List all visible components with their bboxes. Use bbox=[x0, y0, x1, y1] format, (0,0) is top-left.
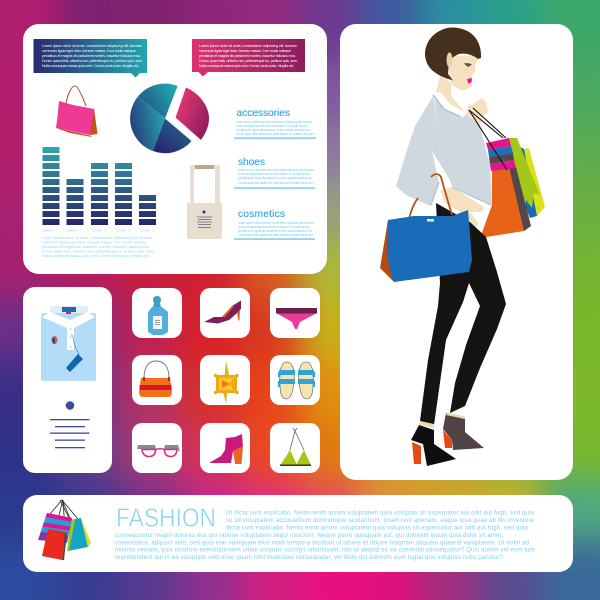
section: cosmetics: penatibus et magnis dis parturient montes, nascetur ridiculus mus. bbox=[238, 229, 313, 233]
illustration: woman with shopping bags bbox=[380, 27, 545, 466]
shopping bag: green bbox=[509, 138, 540, 212]
callout: teal: Lorem ipsum dolor sit amet, consectetuer adipiscing elit. Aenean bbox=[42, 44, 142, 48]
section: shoes: Donec quam felis, ultricies nec, pellentesque eu, pretium quis, sem. bbox=[238, 181, 314, 185]
face bbox=[449, 55, 480, 90]
section: cosmetics: Lorem ipsum dolor sit amet, consectetuer adipiscing elit. Aenean bbox=[238, 221, 314, 225]
neck bbox=[436, 72, 466, 113]
icon: polo shirt bbox=[41, 306, 96, 381]
text block: footer paragraph: su sit voluptatem accusantium doloremque laudantium, totam rem aperiam, eaque ipsa quae ab illo inventore bbox=[226, 518, 535, 524]
callout: pink: Donec quam felis, ultricies nec, pellentesque eu, pretium quis, sem. bbox=[199, 59, 298, 63]
callout: teal: commodo ligula eget dolor. Aenean massa. Cum sociis natoque bbox=[42, 49, 136, 53]
icon tile: briefs bbox=[270, 288, 320, 338]
icon: canvas tote bbox=[187, 165, 222, 239]
icon: shirt label lines bbox=[50, 401, 90, 448]
callout: teal bbox=[34, 39, 147, 78]
text block: footer paragraph: consequuntur magni dolores eos qui ratione voluptatem sequi nesciunt. Neque porro quisquam est, qui dolorem ipsum quia dolor sit amet, bbox=[115, 533, 503, 539]
text block: chart caption bbox=[42, 236, 155, 258]
callout: pink bbox=[192, 39, 305, 76]
panel: shirt bbox=[23, 287, 112, 473]
boot: back bbox=[443, 412, 484, 450]
lower hand bbox=[440, 187, 484, 227]
blue bag handles bbox=[409, 174, 452, 219]
section: accessories: Donec quam felis, ultricies nec, pellentesque eu, pretium quis, sem. bbox=[236, 132, 315, 136]
bar chart: comer 1 bbox=[43, 228, 57, 232]
bar chart: comer 1 bbox=[92, 228, 106, 232]
text block: chart caption: Lorem ipsum dolor sit amet, consectetuer adipiscing elit. Aenean bbox=[42, 236, 152, 240]
text block: footer paragraph: consectetur, adipisci velit, sed quia non numquam eius modi tempora incidunt ut labore et dolore magnam aliquam quaerat voluptatem. Ut enim ad bbox=[115, 540, 529, 546]
icon: pink handbag bbox=[56, 86, 98, 137]
panel: footer bbox=[23, 495, 573, 572]
section: shoes: penatibus et magnis dis parturient montes, nascetur ridiculus mus. bbox=[238, 176, 313, 180]
panel: charts bbox=[23, 24, 327, 274]
bar chart bbox=[42, 147, 156, 232]
collar trim bbox=[433, 95, 461, 117]
callout: teal: Nulla consequat massa quis enim. Donec pede justo, fringilla vel, bbox=[42, 64, 139, 68]
panel: woman bbox=[340, 24, 573, 480]
callout: pink: Nulla consequat massa quis enim. Donec pede justo, fringilla vel, bbox=[199, 64, 294, 68]
section: accessories: Lorem ipsum dolor sit amet, consectetuer adipiscing elit. Aenean bbox=[236, 120, 312, 124]
callout: pink: Lorem ipsum dolor sit amet, consectetuer adipiscing elit. Aenean bbox=[199, 44, 297, 48]
section: cosmetics: Donec quam felis, ultricies nec, pellentesque eu, pretium quis, sem. bbox=[238, 233, 314, 237]
sweater arm bbox=[396, 96, 439, 206]
hand on shoulder bbox=[466, 98, 488, 126]
text block: footer paragraph: Ut dicta sunt explicabo. Nemo enim ipsam voluptatem quia voluptas sit aspernatur aut odit aut fugit, sed quia bbox=[226, 511, 535, 517]
section: accessories: accessories bbox=[236, 108, 290, 119]
shopping bag: yellow and blue bbox=[518, 147, 545, 218]
eye bbox=[464, 63, 472, 67]
icon tile: bikini top bbox=[270, 423, 320, 473]
callout: teal: Donec quam felis, ultricies nec, pellentesque eu, pretium quis, sem. bbox=[42, 59, 143, 63]
section: accessories bbox=[234, 108, 316, 139]
icon tile: heel shoe bbox=[200, 288, 250, 338]
section: accessories: penatibus et magnis dis parturient montes, nascetur ridiculus mus. bbox=[236, 128, 311, 132]
hair bbox=[425, 27, 481, 80]
text block: chart caption: penatibus et magnis dis parturient montes, nascetur ridiculus mus. bbox=[42, 245, 150, 249]
text block: chart caption: Nulla consequat massa quis enim. Donec pede justo, fringilla vel, bbox=[42, 254, 150, 258]
pie chart bbox=[130, 84, 209, 153]
section: accessories: commodo ligula eget dolor. Aenean massa. Cum sociis natoque bbox=[236, 124, 308, 128]
icon tile: perfume bbox=[132, 288, 182, 338]
icon tile: glasses bbox=[132, 423, 182, 473]
icon tile: red handbag bbox=[132, 355, 182, 405]
callout: pink: penatibus et magnis dis parturient montes, nascetur ridiculus mus. bbox=[199, 54, 296, 58]
shopping bag: orange striped bbox=[480, 138, 531, 238]
section: shoes: Lorem ipsum dolor sit amet, consectetuer adipiscing elit. Aenean bbox=[238, 168, 314, 172]
callout: teal: penatibus et magnis dis parturient montes, nascetur ridiculus mus. bbox=[42, 54, 141, 58]
icon: shopping bags bundle bbox=[38, 500, 91, 560]
blue handbag bbox=[380, 210, 472, 282]
text block: footer paragraph: reprehenderit qui in ea voluptate velit esse quam nihil molestiae consequatur, vel illum qui dolorem eum fugiat quo voluptas nulla pariatur? bbox=[115, 555, 504, 561]
text block: footer paragraph: dicta sunt explicabo. Nemo enim ipsam voluptatem quia voluptas sit aspernatur aut odit aut fugit, sed quia bbox=[226, 526, 529, 532]
icon tile: sandals bbox=[270, 355, 320, 405]
bar chart: comer 1 bbox=[116, 228, 130, 232]
text block: footer paragraph bbox=[115, 511, 536, 561]
text block: footer paragraph: minima veniam, quis nostrum exercitationem ullam corporis suscipit laboriosam, nisi ut aliquid ex ea commodi consequatur? Quis autem vel eum iure bbox=[115, 548, 536, 554]
bag handles on shoulder bbox=[469, 108, 507, 170]
section: shoes bbox=[234, 157, 315, 189]
icon tile: gold brooch bbox=[200, 355, 250, 405]
legs bbox=[420, 203, 506, 425]
boot: front bbox=[411, 421, 456, 466]
text block: chart caption: commodo ligula eget dolor. Aenean massa. Cum sociis natoque bbox=[42, 240, 146, 244]
text block: chart caption: Donec quam felis, ultricies nec, pellentesque eu, pretium quis, sem. bbox=[42, 250, 155, 254]
bar chart: comer 1 bbox=[140, 228, 154, 232]
shirt collar bbox=[436, 92, 464, 118]
lips bbox=[467, 78, 472, 84]
callout: pink: commodo ligula eget dolor. Aenean massa. Cum sociis natoque bbox=[199, 49, 291, 53]
sweater torso bbox=[432, 97, 492, 205]
section: shoes: shoes bbox=[238, 157, 265, 168]
icon tile: ankle boot bbox=[200, 423, 250, 473]
sweater hem bbox=[431, 182, 491, 205]
section: cosmetics: cosmetics bbox=[238, 209, 285, 220]
section: shoes: commodo ligula eget dolor. Aenean massa. Cum sociis natoque bbox=[238, 172, 310, 176]
bar chart: comer 1 bbox=[67, 228, 81, 232]
section: cosmetics: commodo ligula eget dolor. Aenean massa. Cum sociis natoque bbox=[238, 225, 310, 229]
title: FASHION bbox=[116, 505, 216, 533]
section: cosmetics bbox=[234, 209, 315, 240]
ear bbox=[446, 52, 452, 68]
